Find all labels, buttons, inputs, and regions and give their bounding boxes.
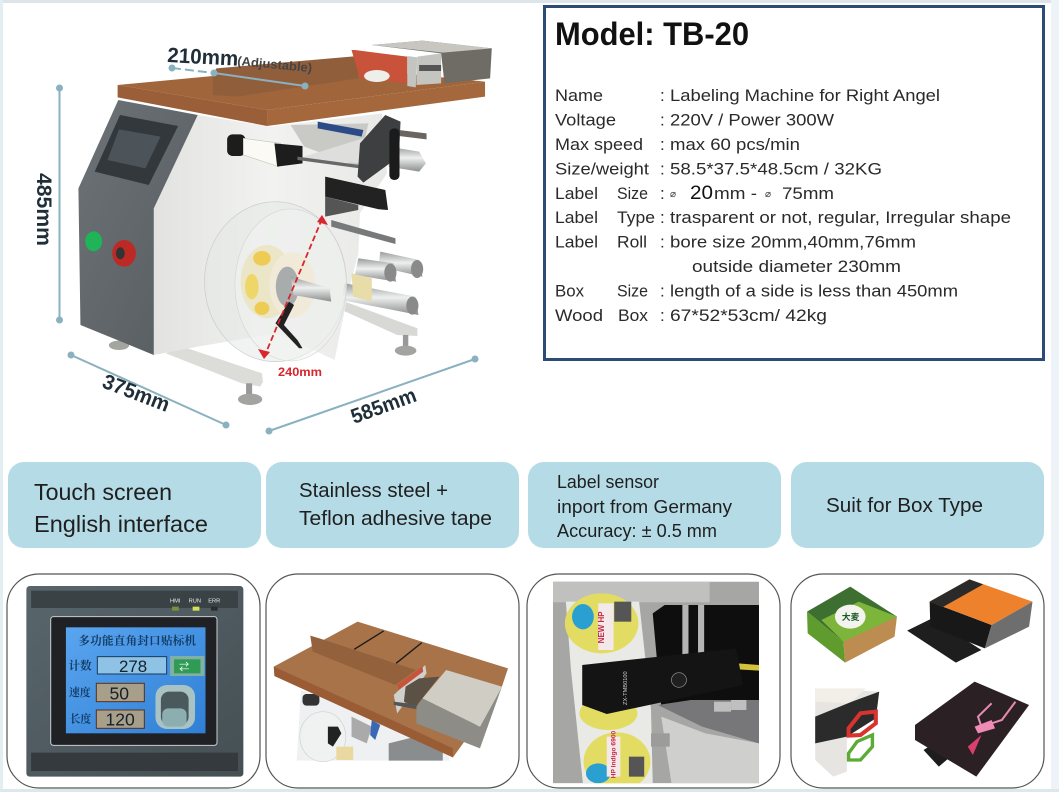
feature card: label sensor: Accuracy: ± 0.5 mm bbox=[557, 521, 717, 541]
spec: box size: Size bbox=[617, 282, 648, 300]
feature card: touch screen: Touch screen bbox=[34, 479, 172, 505]
spec: label size: ⌀ bbox=[670, 189, 676, 200]
width dimension line bbox=[266, 356, 478, 434]
lower right bracket bbox=[658, 700, 759, 743]
spec: size and weight: Size/weight bbox=[555, 160, 649, 178]
machine photo with dimension annotations bbox=[32, 41, 492, 434]
spec: wood box: Box bbox=[618, 306, 649, 325]
spec: label type bbox=[555, 208, 1011, 227]
spec: label type: trasparent or not, regular, Irregular shape bbox=[670, 208, 1011, 227]
feature card: touch screen: English interface bbox=[34, 511, 208, 537]
gray control housing bbox=[78, 100, 198, 355]
spec: max speed: : bbox=[660, 135, 665, 154]
label: 485mm: 485mm bbox=[32, 173, 55, 246]
spec: wood box: 67*52*53cm/ 42kg bbox=[670, 306, 827, 325]
spec: label roll: outside diameter 230mm bbox=[692, 257, 901, 276]
spec: label size: Label bbox=[555, 184, 598, 203]
spec: label size: 75mm bbox=[782, 184, 834, 203]
machine illustration bbox=[78, 41, 492, 405]
wood plate bbox=[274, 622, 508, 757]
machine below table bbox=[297, 690, 450, 762]
feature card: box type bbox=[791, 462, 1044, 548]
round labels: HP Indigo 6900 bbox=[610, 731, 617, 778]
sensor dial bbox=[671, 673, 686, 687]
panel: table plate photo bbox=[266, 574, 519, 788]
green box: 大麦 bbox=[842, 610, 860, 623]
feature card: box type: Suit for Box Type bbox=[826, 494, 983, 517]
spec: voltage bbox=[555, 110, 834, 130]
title: Model: TB-20 bbox=[555, 16, 749, 52]
touch screen bbox=[95, 115, 178, 185]
HMI LCD screen: 长度 bbox=[70, 712, 92, 727]
fence and pusher bbox=[213, 50, 417, 97]
spec: max speed bbox=[555, 135, 800, 154]
spec: wood box: Wood bbox=[555, 306, 603, 325]
label: 210mm: 210mm bbox=[167, 44, 239, 71]
spec: size and weight bbox=[555, 160, 882, 178]
label backing strip bbox=[566, 602, 653, 783]
HMI housing: RUN bbox=[189, 599, 201, 605]
spec: voltage: 220V / Power 300W bbox=[670, 110, 834, 130]
feature card: label sensor: inport from Germany bbox=[557, 497, 732, 517]
dark machine back bbox=[653, 605, 759, 707]
spec: label size: mm - bbox=[714, 184, 757, 203]
slots bbox=[354, 631, 422, 663]
HMI LCD screen: 计数 bbox=[69, 657, 92, 673]
transparent label disc bbox=[204, 202, 346, 362]
spec: label size bbox=[555, 182, 834, 204]
feature card: stainless steel bbox=[266, 462, 519, 548]
feature card: stainless steel: Stainless steel + bbox=[299, 479, 448, 502]
spec: label type: Type bbox=[617, 208, 655, 227]
HMI LCD screen: 多功能直角封口贴标机 bbox=[78, 633, 197, 649]
HMI LCD screen: 278 bbox=[119, 657, 147, 676]
top roller bbox=[553, 582, 710, 602]
red emergency stop bbox=[112, 240, 136, 267]
upper roller assembly bbox=[227, 115, 401, 183]
sensor bracket bbox=[325, 177, 388, 217]
panel: box types photo bbox=[791, 574, 1044, 788]
spec: label size: ⌀ bbox=[765, 189, 771, 200]
pusher plate and screw bbox=[394, 665, 439, 713]
guide rods bbox=[682, 605, 704, 654]
spec: box size: Box bbox=[555, 282, 584, 300]
spec: label size: Size bbox=[617, 184, 648, 203]
spec: size and weight: 58.5*37.5*48.5cm / 32KG bbox=[670, 160, 882, 178]
fence bbox=[310, 636, 416, 685]
spec: label roll bbox=[555, 232, 916, 276]
round labels bbox=[565, 593, 650, 791]
sensor model text: ZX-TMB0100 bbox=[623, 671, 629, 705]
spec: label roll: bore size 20mm,40mm,76mm bbox=[670, 232, 916, 252]
HMI bezel bbox=[51, 617, 217, 745]
HMI LCD screen: ⇄ bbox=[179, 662, 189, 674]
yellow cable bbox=[738, 663, 759, 671]
panel: sensor photo bbox=[527, 574, 780, 791]
spec: name: : bbox=[660, 86, 665, 105]
photo background bbox=[553, 582, 759, 783]
spec: label roll: Roll bbox=[617, 232, 647, 252]
label: 240mm: 240mm bbox=[278, 365, 322, 379]
spec: max speed: max 60 pcs/min bbox=[670, 135, 800, 154]
feet and base bars bbox=[109, 302, 417, 405]
spec: box size: length of a side is less than 450mm bbox=[670, 282, 958, 300]
sensor body bbox=[582, 648, 743, 714]
HMI LCD screen bbox=[66, 627, 206, 733]
HMI LCD screen: 速度 bbox=[69, 685, 91, 700]
green box bbox=[807, 587, 897, 663]
spec: voltage: : bbox=[660, 110, 665, 130]
spec: box size bbox=[555, 282, 958, 300]
HMI housing bbox=[26, 586, 243, 777]
spec: label type: : bbox=[660, 208, 665, 227]
spec: label roll: Label bbox=[555, 232, 598, 252]
HMI housing: HMI bbox=[170, 599, 181, 605]
spec: wood box bbox=[555, 306, 827, 325]
green button bbox=[85, 231, 102, 251]
white side panel bbox=[154, 113, 387, 360]
spec: name: Name bbox=[555, 86, 603, 105]
steel box bbox=[416, 670, 502, 748]
feature card: label sensor bbox=[528, 462, 781, 548]
label: 585mm: 585mm bbox=[348, 384, 420, 429]
height dimension line bbox=[56, 84, 63, 324]
depth dimension line bbox=[68, 352, 230, 428]
red diameter arrow bbox=[258, 215, 328, 359]
plate front edge bbox=[274, 667, 453, 757]
round labels: NEW HP bbox=[597, 611, 606, 643]
spec: wood box: : bbox=[660, 306, 665, 325]
feature card: stainless steel: Teflon adhesive tape bbox=[299, 507, 492, 530]
orange box bbox=[907, 579, 1032, 663]
feature card: label sensor: Label sensor bbox=[557, 472, 659, 492]
rear rollers bbox=[331, 130, 427, 315]
earphone box bbox=[915, 682, 1029, 777]
spec: label size: : bbox=[660, 184, 665, 203]
HMI LCD screen: 50 bbox=[110, 683, 129, 703]
spec: max speed: Max speed bbox=[555, 135, 643, 154]
spec: name bbox=[555, 86, 940, 105]
label roll bbox=[241, 245, 331, 348]
label: adjustable: (Adjustable) bbox=[237, 54, 313, 75]
spec: size and weight: : bbox=[660, 160, 665, 178]
screws bbox=[714, 700, 746, 712]
wooden table bbox=[118, 68, 485, 126]
spec: name: Labeling Machine for Right Angel bbox=[670, 86, 940, 105]
spec: label size: 20 bbox=[690, 182, 713, 204]
panel: specifications bbox=[544, 6, 1044, 360]
spec: label roll: : bbox=[660, 232, 665, 252]
HMI housing: ERR bbox=[208, 599, 220, 605]
adjustable dimension line bbox=[168, 64, 308, 90]
feature card: touch screen bbox=[8, 462, 261, 548]
label: 375mm: 375mm bbox=[99, 370, 173, 417]
HMI LCD screen: 120 bbox=[105, 710, 135, 730]
spec: voltage: Voltage bbox=[555, 110, 616, 130]
handle box bbox=[815, 688, 879, 777]
spec: box size: : bbox=[660, 282, 665, 300]
spec: label type: Label bbox=[555, 208, 598, 227]
top steel box bbox=[372, 41, 492, 85]
panel: touch screen photo bbox=[7, 574, 260, 788]
